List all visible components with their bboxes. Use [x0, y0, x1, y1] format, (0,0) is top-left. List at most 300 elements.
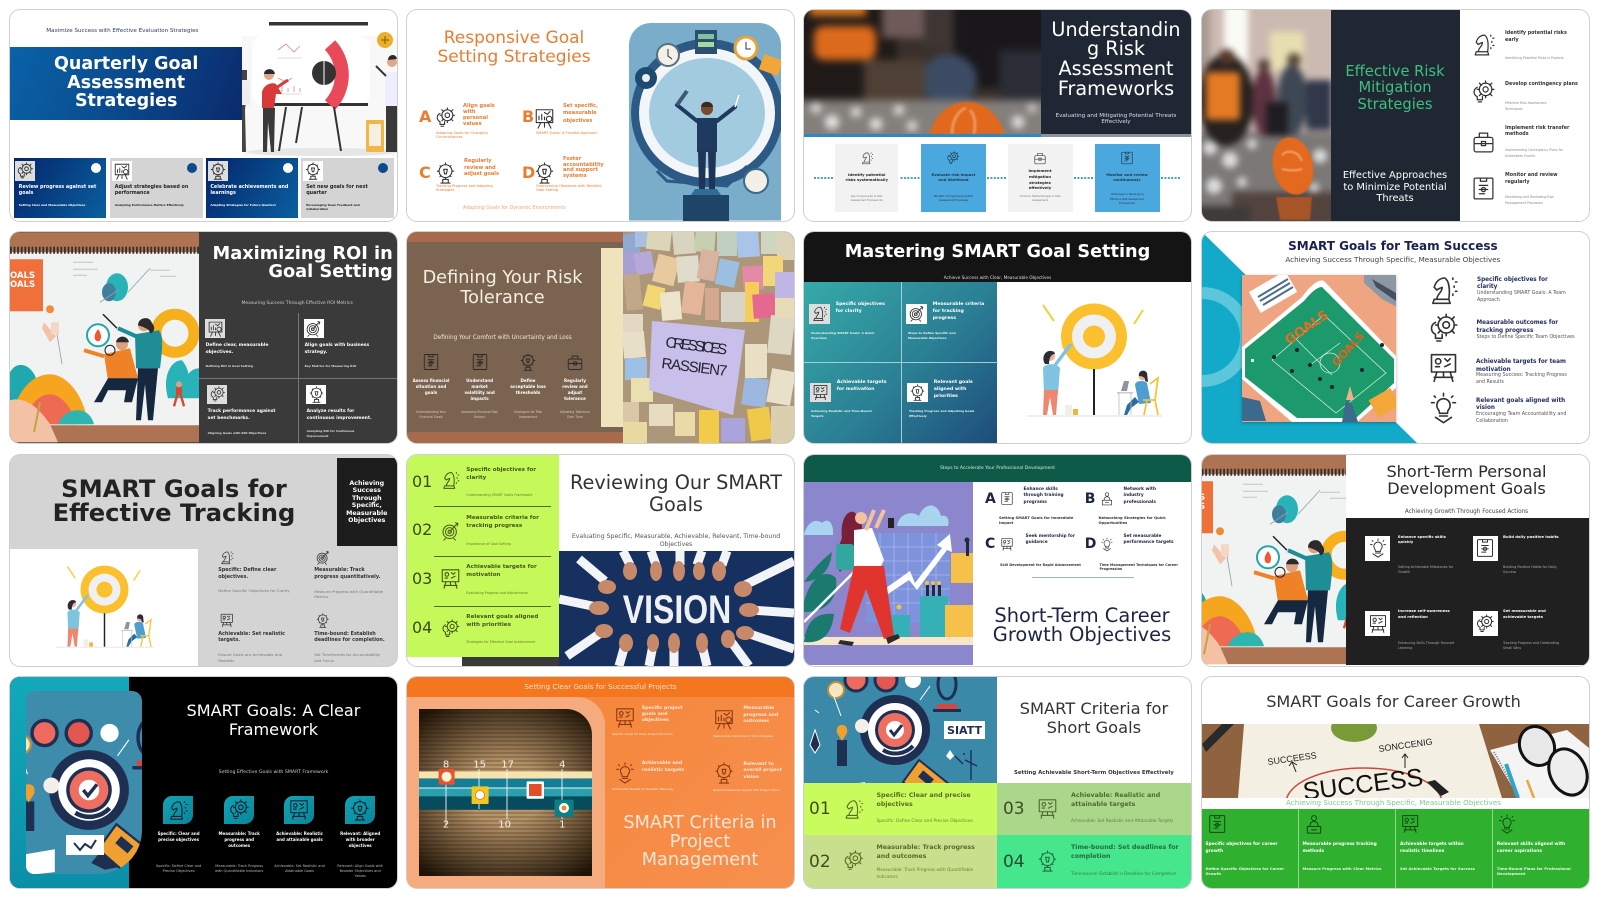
text: [563, 103, 598, 124]
text: progress: [933, 316, 956, 321]
text: [1124, 487, 1156, 506]
text: [1497, 841, 1565, 855]
note: handwritten sign: [648, 321, 744, 415]
text: [1476, 398, 1565, 413]
text: Measurable: Track: [219, 831, 260, 836]
text: Specific: Clear and precise: [876, 792, 971, 799]
item B: [522, 103, 598, 135]
text: [1400, 841, 1464, 855]
caption: Strategies: [436, 188, 454, 192]
caption: Setting Clear and Measurable Objectives: [19, 203, 85, 207]
text: Network with: [1124, 487, 1156, 492]
caption: Success: [1503, 570, 1516, 574]
objective 3: [810, 379, 898, 421]
text: Specific project: [642, 706, 683, 711]
text: methods: [1302, 849, 1324, 854]
icon: [218, 550, 236, 565]
caption: Tracking Progress and Adjusting Goals: [909, 409, 974, 413]
caption: Set Timeframes for Accountability: [314, 652, 380, 657]
dark actions panel: [1346, 518, 1588, 665]
illustration: target under magnifier: [804, 677, 997, 783]
bottom stripe: [407, 432, 622, 443]
caption: Assessing Personal Risk: [461, 410, 498, 414]
caption: Enhancing Skills Through Focused: [1398, 641, 1454, 645]
item B: [1083, 487, 1178, 529]
item 1: [1470, 30, 1586, 62]
text: Achievable targets for: [466, 564, 537, 570]
illustration: notebook with analysts: [1202, 455, 1346, 666]
icon: [1472, 611, 1498, 636]
caption: Assessment: [519, 415, 537, 419]
icon: [1426, 313, 1460, 345]
text: Monitor and review: [1505, 173, 1558, 178]
illustration panel: [10, 549, 198, 666]
badge: [187, 163, 197, 173]
caption: Measure Progress with Quantifiable: [314, 589, 383, 594]
caption: Measure Progress with Clear Metrics: [1302, 866, 1381, 871]
caption: [461, 410, 498, 420]
text: adjust: [568, 390, 582, 395]
caption: Analyzing ROI for Continuous: [307, 429, 354, 433]
text: [466, 514, 539, 530]
caption: [436, 184, 493, 192]
text: growth: [1206, 849, 1223, 854]
caption: Time Management Techniques for Career: [1100, 562, 1178, 566]
title: Strategies: [75, 91, 177, 111]
caption: Growth: [1206, 871, 1221, 876]
text: [307, 409, 372, 422]
title: Goals: [649, 493, 703, 516]
text: Achievable targets for team: [1476, 359, 1566, 365]
caption: Building Positive Habits for Daily: [1503, 565, 1557, 569]
subtitle: [1056, 113, 1176, 125]
text: Identify potential: [848, 172, 885, 176]
title: [53, 477, 295, 525]
item 4: [553, 352, 597, 422]
subtitle: Specific,: [352, 502, 382, 509]
icon: [536, 109, 554, 129]
icon: [614, 707, 636, 729]
text: [314, 567, 380, 580]
photo: blurred workshop with orange bag: [1202, 10, 1330, 220]
caption: Frameworks: [1119, 202, 1135, 205]
cell 04: [997, 835, 1191, 888]
slide card: Understanding Risk Assessment Frameworks: [804, 10, 1191, 220]
caption: Small Wins: [1503, 646, 1521, 650]
photo: timeline on wood: 15: [474, 760, 486, 771]
caption: Effective Risk Assessment: [1110, 198, 1144, 200]
caption: Strategies for Effective Goal Achievement: [466, 640, 535, 644]
header bar: [804, 455, 1191, 482]
title: [1020, 700, 1168, 737]
objective 4: [907, 379, 995, 421]
caption: Strategies for Risk: [514, 410, 542, 414]
step box 3: [1008, 144, 1072, 212]
caption: Achievable Targets for Realistic Planning: [612, 787, 673, 791]
caption: Key Metrics for Measuring ROI: [305, 364, 356, 368]
text: impacts: [470, 396, 489, 401]
caption: Attainable Goals: [285, 869, 314, 873]
caption: [1398, 565, 1453, 575]
text: [413, 378, 449, 396]
caption: [436, 131, 488, 139]
text: clarity: [1477, 284, 1497, 290]
text: [933, 302, 984, 323]
item 2: [1470, 80, 1586, 112]
icon: [1470, 129, 1496, 154]
slide card: Responsive Goal Setting Strategies: [407, 10, 794, 220]
title: [1345, 62, 1445, 113]
top stripe: [407, 232, 622, 242]
text: quickly: [1398, 539, 1413, 544]
caption: [306, 203, 360, 211]
title: Assessment: [67, 73, 185, 93]
slide card: Short-Term Career Growth Objectives: [804, 455, 1191, 666]
caption: Analyzing Performance Metrics Effectively: [115, 203, 184, 207]
caption: [156, 864, 201, 874]
title: Effective Risk: [1345, 62, 1445, 80]
cell 03: [997, 783, 1191, 835]
text: Implement risk transfer: [1505, 126, 1569, 131]
text: [1026, 534, 1075, 546]
title: SMART Criteria for: [1020, 699, 1168, 718]
note: handwritten sign: CRESSICES: [664, 334, 728, 359]
text: Build daily positive habits: [1503, 534, 1559, 539]
text: [876, 844, 975, 862]
caption: [1098, 516, 1166, 526]
caption: Adapting Strategies for Future Quarters: [210, 203, 276, 207]
item D: [522, 156, 604, 192]
text: Set specific,: [563, 103, 598, 109]
caption: Encouraging Team Accountability and: [1476, 412, 1566, 417]
icon: [439, 618, 462, 638]
caption: [999, 516, 1073, 526]
text: accountability: [563, 162, 604, 168]
metric 4: [306, 384, 394, 438]
text: outcomes: [228, 843, 250, 848]
caption: Time-bound: Establish a Deadline for Completion: [1071, 872, 1176, 877]
text: for tracking: [933, 309, 964, 314]
slide card: SMART Goals for Career Growth: [1202, 677, 1588, 888]
text: precise objectives: [158, 837, 199, 842]
subtitle: to Minimize Potential: [1343, 182, 1447, 193]
caption: Achieving Realistic and Time-Bound: [811, 409, 872, 413]
cream block: [600, 248, 622, 427]
icon: [1000, 491, 1014, 506]
text: [1106, 172, 1148, 182]
text: with priorities: [466, 622, 511, 628]
caption: Progression: [1100, 567, 1122, 571]
text: [876, 792, 971, 810]
subtitle: Setting Effective Goals with SMART Framework: [219, 770, 328, 775]
text: review and: [464, 164, 496, 170]
illustration: woman walking with rising arrow: [804, 482, 973, 665]
title banner: [10, 47, 242, 120]
text: regularly: [1505, 180, 1530, 185]
caption: Understanding SMART Goals Framework: [466, 493, 532, 497]
teal side panel: [10, 677, 129, 888]
item C: [984, 533, 1079, 569]
caption: [1505, 100, 1547, 112]
icon: [842, 850, 865, 872]
text: Measurable: Track progress: [876, 844, 975, 851]
text: [1206, 841, 1278, 855]
item 03: [412, 563, 554, 599]
objectives panel: [804, 282, 997, 443]
title: SMART Goals: A Clear: [187, 701, 360, 720]
text: Achievable and: [642, 761, 682, 766]
bottom dark bar: [462, 656, 559, 666]
title: [213, 245, 393, 282]
title: Strategies: [1357, 96, 1433, 113]
text: objectives.: [218, 574, 248, 580]
icon: [713, 708, 735, 730]
title: Defining Your Risk: [423, 268, 582, 288]
text: Achievable targets: [837, 380, 886, 385]
caption: [1100, 562, 1178, 572]
text: priorities: [934, 394, 958, 399]
subtitle: Effectively: [1101, 119, 1131, 125]
header bar: [407, 677, 794, 697]
caption: Evaluating Progress and Adjustments: [466, 591, 528, 595]
title: Reviewing Our SMART: [570, 471, 782, 494]
title: Short-Term Personal: [1386, 462, 1547, 481]
text: objectives: [563, 118, 592, 124]
photo: football tactic board: [1242, 275, 1396, 422]
photo: SUCCESS written on paper: [1202, 724, 1588, 798]
caption: [337, 864, 383, 879]
item A: [984, 487, 1079, 529]
text: [1071, 844, 1179, 862]
column 2: [1302, 813, 1392, 883]
text: [845, 172, 888, 182]
title: [570, 472, 782, 515]
text: Assess financial: [413, 378, 449, 383]
title: Understandin: [1051, 18, 1181, 40]
text: [466, 563, 537, 579]
photo: timeline on wood: 8: [443, 760, 450, 771]
letter: A: [419, 107, 431, 126]
caption: Measurable Outcomes to Track Progress: [713, 734, 773, 738]
icon: [842, 798, 865, 820]
text: [276, 831, 323, 843]
text: [837, 380, 886, 394]
photo: timeline on wood: 17: [502, 760, 514, 771]
caption: Networking Strategies for Quick: [1098, 516, 1166, 520]
title: Mitigation: [1358, 79, 1432, 96]
icon: [314, 613, 332, 628]
text: learnings: [210, 190, 236, 196]
item C: [419, 158, 499, 192]
icon: [1100, 537, 1114, 552]
text: deadlines for completion.: [314, 637, 385, 643]
caption: Monitoring and Reviewing Risk: [1505, 195, 1554, 199]
caption: Tracking Progress and Celebrating: [1503, 641, 1559, 645]
illustration: team at whiteboard: [242, 22, 397, 156]
objective 1: [809, 301, 897, 343]
text: Seek mentorship for: [1026, 534, 1075, 539]
caption: Achievable: Set Realistic and: [274, 864, 325, 868]
caption: Effectively: [909, 414, 927, 418]
item 2: [458, 352, 502, 422]
step card 4: [301, 158, 394, 218]
text: [1398, 608, 1450, 620]
text: professionals: [1124, 500, 1156, 505]
caption: Assessment Frameworks: [851, 199, 883, 202]
number: 04: [412, 618, 432, 637]
text: thresholds: [516, 390, 540, 395]
text: completion: [1071, 853, 1111, 860]
number: 01: [412, 472, 432, 491]
icon: [304, 319, 324, 338]
item 1: [611, 705, 695, 739]
caption: [850, 194, 883, 202]
caption: Encouraging Team Feedback and: [306, 203, 360, 207]
text: guidance: [1026, 540, 1048, 545]
icon: [1034, 153, 1046, 164]
text: Monitor and review: [1106, 172, 1148, 176]
criterion 4: [314, 613, 394, 663]
caption: Unforeseen Events: [1505, 154, 1535, 158]
title: [187, 702, 360, 739]
icon: [536, 162, 554, 184]
text: Achievable: Realistic and: [1071, 792, 1160, 799]
title: SMART Goals for Team Success: [1288, 239, 1498, 253]
text: Relevant skills aligned with: [1497, 842, 1565, 847]
text: volatility and: [464, 390, 495, 395]
text: for motivation: [837, 387, 874, 392]
caption: [218, 652, 282, 664]
text: realistic targets: [642, 768, 684, 772]
title: Short Goals: [1047, 718, 1141, 737]
slide card: Defining Your Risk Tolerance: [407, 232, 794, 443]
icon: [1470, 80, 1496, 105]
icon: [208, 161, 228, 181]
peach photo backing: [407, 697, 604, 888]
letter: B: [1085, 491, 1095, 507]
caption: [876, 868, 973, 881]
text: Relevant goals: [934, 380, 973, 385]
photo: timeline on wood: 4: [560, 760, 566, 771]
text: systems: [563, 173, 587, 179]
caption: Opportunities: [1098, 521, 1127, 525]
text: Achievable: Realistic: [276, 831, 323, 836]
caption: Impact: [999, 521, 1013, 525]
text: motivation: [466, 572, 500, 578]
caption: Tracking Progress and Adapting: [436, 184, 493, 188]
text: [836, 302, 885, 316]
caption: with Quantifiable Indicators: [215, 869, 263, 873]
icon: [306, 385, 326, 404]
criterion R: [332, 795, 390, 880]
dark title panel: [1330, 10, 1460, 220]
number: 02: [809, 852, 831, 872]
text: Regularly: [464, 158, 491, 164]
badge: [91, 163, 101, 173]
caption: [514, 410, 542, 420]
text: Measurable: [743, 706, 774, 711]
caption: [307, 429, 354, 439]
subtitle: Objectives: [660, 541, 692, 548]
text: Track performance against: [208, 409, 276, 414]
text: [464, 378, 495, 402]
text: [743, 706, 778, 725]
text: and attainable goals: [276, 837, 323, 842]
caption: Measurable: Track Progress: [215, 864, 263, 868]
criterion M: [211, 795, 269, 880]
caption: Over Time: [567, 415, 583, 419]
step box 4: [1095, 144, 1160, 212]
slide card: Maximizing ROI in Goal Setting: [10, 232, 397, 443]
text: Enhance specific skills: [1398, 534, 1446, 539]
caption: Overview: [811, 336, 827, 340]
title: Mastering SMART Goal Setting: [845, 242, 1150, 262]
subtitle: Through: [352, 495, 382, 502]
caption: Management Processes: [1505, 201, 1543, 205]
action 1: [1365, 533, 1465, 578]
caption: Achievable: Set Realistic and Attainable Targets: [1071, 819, 1173, 824]
text: continuously: [1113, 177, 1141, 182]
caption: Adjusting Tolerance: [560, 410, 590, 414]
subtitle: Achieving Success Through Specific, Measurable Objectives: [1285, 255, 1500, 264]
step card 1: [14, 158, 106, 218]
caption: Understanding SMART Goals: A Quick: [811, 331, 874, 335]
icon: [218, 613, 236, 628]
subtitle: Maximize Success with Effective Evaluation Strategies: [46, 28, 198, 34]
icon: [439, 470, 462, 490]
text: Regularly: [564, 378, 586, 383]
text: clarity: [466, 475, 486, 481]
text: [340, 831, 380, 849]
caption: [1476, 411, 1566, 425]
subtitle: Setting Clear Goals for Successful Projects: [524, 682, 677, 691]
subtitle: Threats: [1376, 193, 1414, 204]
text: [642, 761, 684, 774]
icon: [1426, 352, 1460, 384]
slide card: Reviewing Our SMART Goals: [407, 455, 794, 666]
text: and outcomes: [876, 853, 926, 860]
letter: D: [522, 163, 535, 182]
caption: [811, 409, 872, 419]
text: Time-bound: Establish: [314, 631, 376, 637]
text: quarter: [306, 190, 327, 196]
slide card: SMART Criteria in Project Management: [407, 677, 794, 888]
icon: [907, 383, 928, 402]
text: Measurable progress tracking: [1302, 842, 1377, 847]
icon: [614, 762, 636, 784]
caption: Broader Objectives and: [340, 869, 381, 873]
text: Adjust strategies based on: [115, 184, 188, 190]
badge: [378, 163, 388, 173]
text: market: [471, 384, 488, 389]
text: Enhance skills: [1024, 487, 1058, 492]
text: continuous improvement.: [307, 416, 372, 420]
text: [1505, 173, 1558, 186]
icon: [439, 568, 462, 590]
subtitle: Evaluating and Mitigating Potential Threats: [1056, 113, 1176, 119]
text: tracking progress: [1476, 328, 1533, 334]
caption: Learning: [1398, 646, 1412, 650]
icon: [1365, 611, 1390, 636]
caption: Setting Achievable Milestones for: [1398, 565, 1453, 569]
item 04: [412, 612, 554, 648]
text: [210, 184, 288, 196]
letter: B: [522, 107, 534, 126]
caption: Measurable: Track Progress with Quantifiable: [876, 868, 973, 873]
item 02: [412, 514, 554, 550]
caption: Ensure Goals are Achievable and: [218, 652, 282, 657]
text: Analyze results for: [307, 409, 354, 414]
